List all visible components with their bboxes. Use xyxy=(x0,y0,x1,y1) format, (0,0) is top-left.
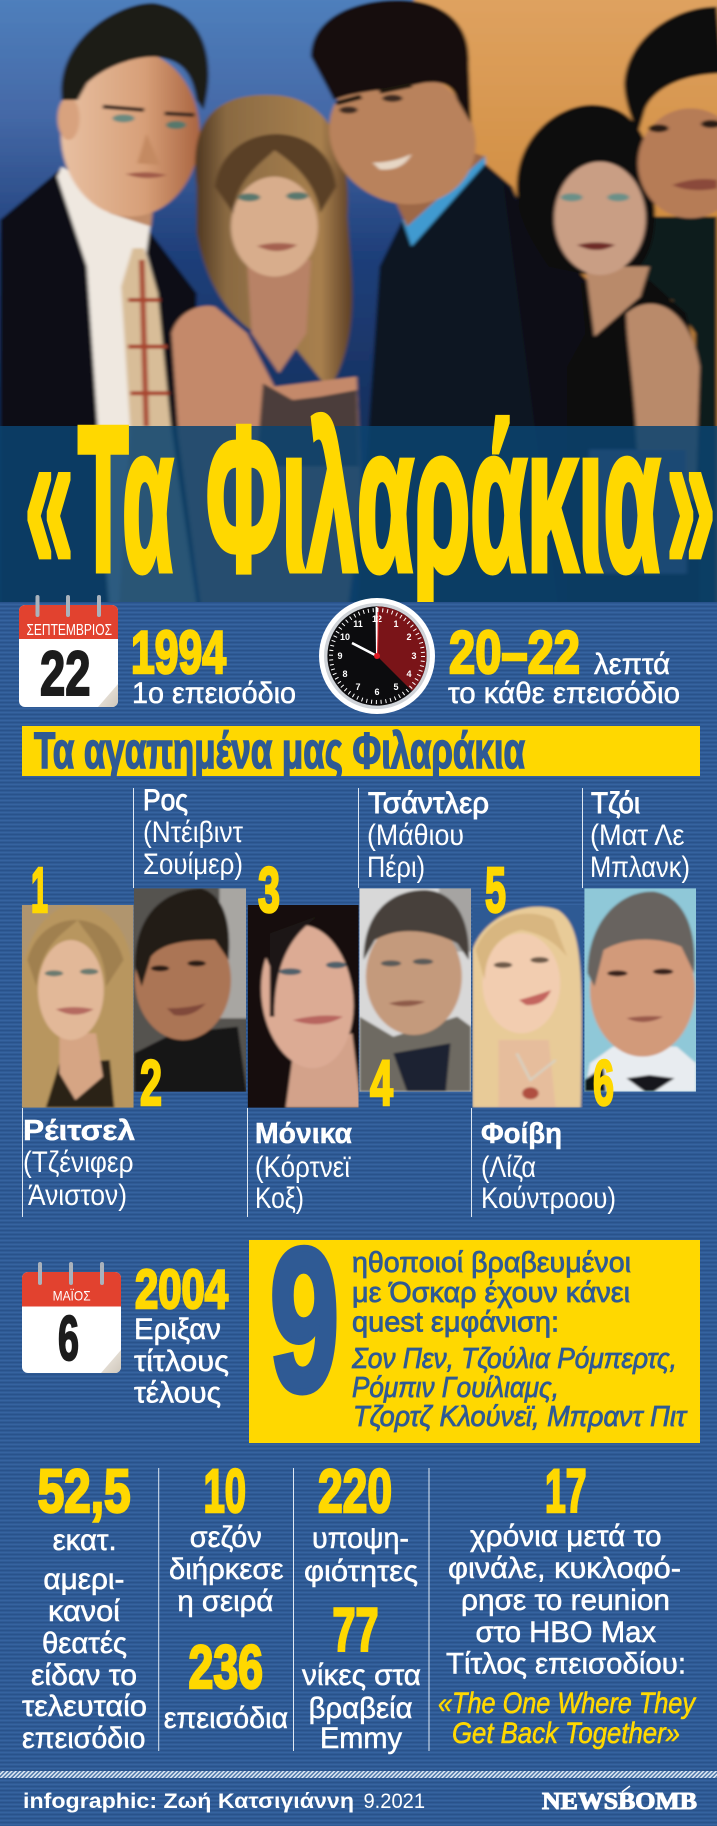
stat: 17 years, reunion: Τίτλος επεισοδίου: xyxy=(446,1648,686,1680)
icon: clock: 9 xyxy=(337,651,343,661)
caption: Ross: Σουίμερ) xyxy=(143,848,243,881)
caption: Monica xyxy=(255,1118,352,1215)
first episode date: 1994 xyxy=(131,619,226,686)
stat: 52.5 million viewers: επεισόδιο xyxy=(22,1722,146,1755)
caption: Ross xyxy=(143,784,243,881)
stat: 17 years, reunion: ρησε το reunion xyxy=(461,1584,670,1617)
stat: 10 seasons, 236 episodes: σεζόν xyxy=(190,1521,262,1554)
icon: calendar 22 September xyxy=(19,597,118,709)
photo: Phoebe xyxy=(469,902,588,1112)
episode duration: το κάθε επεισόδιο xyxy=(448,677,680,710)
caption: Joey: Τζόι xyxy=(591,787,640,820)
stat: 17 years, reunion: χρόνια μετά το xyxy=(470,1520,662,1553)
episode duration: λεπτά xyxy=(594,648,670,681)
stat: 220 nominations, 77 Emmy wins: υποψη- xyxy=(312,1522,409,1555)
stat: 10 seasons, 236 episodes: επεισόδια xyxy=(164,1702,288,1735)
panel: Oscar winners guest appearances: 9 xyxy=(270,1207,339,1434)
caption: Chandler: Πέρι) xyxy=(367,851,425,884)
caption: Chandler: (Μάθιου xyxy=(367,819,464,852)
final episode date: τίτλους xyxy=(134,1345,229,1378)
caption: Monica: Κοξ) xyxy=(255,1182,304,1215)
photo: Chandler xyxy=(357,885,476,1095)
first episode date xyxy=(131,619,296,710)
stat: 220 nominations, 77 Emmy wins: νίκες στα xyxy=(302,1659,421,1692)
caption: Chandler: Τσάντλερ xyxy=(368,787,489,820)
stat: 52.5 million viewers: εκατ. xyxy=(53,1524,117,1557)
title: « xyxy=(25,384,73,614)
panel: Oscar winners guest appearances: ηθοποιοί βραβευμένοι xyxy=(352,1247,631,1279)
caption: Phoebe: Κούντροου) xyxy=(481,1182,616,1215)
panel: Oscar winners guest appearances: με Όσκαρ έχουν κάνει xyxy=(352,1277,630,1309)
panel: Oscar winners guest appearances xyxy=(249,1207,700,1443)
caption: Phoebe: (Λίζα xyxy=(481,1151,536,1184)
stat: 10 seasons, 236 episodes: διήρκεσε xyxy=(169,1553,284,1586)
icon: clock: 4 xyxy=(406,669,412,679)
icon: clock: 6 xyxy=(374,687,380,697)
icon: clock: 2 xyxy=(406,632,412,642)
caption: Monica: (Κόρτνεϊ xyxy=(255,1151,351,1184)
stat: 10 seasons, 236 episodes: η σειρά xyxy=(177,1585,273,1618)
rank numbers: 5 xyxy=(485,854,506,926)
footer credit: infographic: Ζωή Κατσιγιάννη xyxy=(23,1790,354,1813)
icon: clock: 1 xyxy=(393,619,399,629)
portrait photos xyxy=(18,885,700,1113)
stat: 220 nominations, 77 Emmy wins: 77 xyxy=(332,1596,378,1664)
photo: Rachel xyxy=(18,900,137,1113)
hero photo: the cast xyxy=(0,0,717,610)
rank numbers: 2 xyxy=(140,1047,162,1119)
title: Τα xyxy=(78,384,173,614)
photo: Joey xyxy=(581,885,700,1095)
stat: 220 nominations, 77 Emmy wins: Emmy xyxy=(320,1722,402,1755)
caption: Joey: Μπλανκ) xyxy=(590,851,690,884)
final episode date: 2004 xyxy=(135,1258,228,1320)
icon: calendar 22 September: 22 xyxy=(40,639,90,709)
panel: Oscar winners guest appearances: Σον Πεν, Τζούλια Ρόμπερτς, xyxy=(351,1343,677,1375)
rank numbers xyxy=(31,854,614,1119)
caption: Phoebe: Φοίβη xyxy=(481,1118,562,1150)
rank numbers: 4 xyxy=(370,1047,393,1119)
icon: clock: 12 xyxy=(372,614,382,624)
stat: 52.5 million viewers xyxy=(22,1457,147,1755)
icon: clock: 10 xyxy=(340,632,350,642)
panel: Oscar winners guest appearances: quest εμφάνιση: xyxy=(352,1306,559,1338)
final episode date: τέλους xyxy=(134,1376,221,1410)
stat: 52.5 million viewers: 52,5 xyxy=(38,1457,131,1525)
title xyxy=(27,412,713,602)
icon: clock: 5 xyxy=(393,682,399,692)
caption: Chandler xyxy=(367,787,489,884)
episode duration: 20–22 xyxy=(449,619,580,686)
photo: Ross xyxy=(130,885,249,1095)
stat: 52.5 million viewers: θεατές xyxy=(42,1627,127,1660)
icon: clock: 7 xyxy=(355,682,361,692)
stat: 220 nominations, 77 Emmy wins: φιότητες xyxy=(304,1555,418,1588)
stats dividers xyxy=(159,1468,429,1751)
stat: 52.5 million viewers: αμερι- xyxy=(43,1563,124,1596)
final episode date: Εριξαν xyxy=(134,1313,221,1346)
caption: Phoebe xyxy=(481,1118,616,1215)
final episode date xyxy=(134,1258,229,1410)
icon: clock xyxy=(319,598,435,714)
stat: 10 seasons, 236 episodes xyxy=(164,1457,288,1735)
stat: 17 years, reunion: στο HBO Max xyxy=(476,1616,656,1649)
footer credit: 9.2021 xyxy=(364,1790,425,1813)
icon: calendar 6 May xyxy=(22,1264,121,1374)
rank numbers: 1 xyxy=(31,854,48,926)
icon: calendar 6 May: ΜΑΪΟΣ xyxy=(53,1288,91,1304)
stat: 17 years, reunion xyxy=(438,1457,697,1750)
icon: calendar 22 September: ΣΕΠΤΕΜΒΡΙΟΣ xyxy=(26,622,112,639)
panel: Oscar winners guest appearances: Ρόμπιν Γουίλιαμς, xyxy=(352,1372,559,1404)
icon: calendar 6 May: 6 xyxy=(58,1304,79,1374)
stat: 17 years, reunion: 17 xyxy=(545,1457,586,1525)
icon: clock: 11 xyxy=(353,619,363,629)
episode duration xyxy=(448,619,680,710)
translucent title band xyxy=(0,426,717,602)
stat: 10 seasons, 236 episodes: 10 xyxy=(204,1457,246,1525)
caption: Joey xyxy=(590,787,690,884)
stat: 10 seasons, 236 episodes: 236 xyxy=(188,1633,263,1701)
first episode date: 1ο επεισόδιο xyxy=(132,677,296,710)
photo: Monica xyxy=(245,902,364,1112)
panel: Oscar winners guest appearances: Τζορτζ Κλούνεϊ, Μπραντ Πιτ xyxy=(353,1401,688,1433)
caption: Ross: (Ντέιβιντ xyxy=(143,816,243,849)
stat: 52.5 million viewers: κανοί xyxy=(48,1595,120,1628)
stat: 220 nominations, 77 Emmy wins: βραβεία xyxy=(309,1692,413,1725)
rank numbers: 3 xyxy=(258,854,280,926)
logo: Newsbomb: NEWSBOMB xyxy=(542,1789,697,1815)
icon: clock: 3 xyxy=(411,651,417,661)
caption: Rachel: Ρέιτσελ xyxy=(23,1115,135,1147)
icon: clock: 8 xyxy=(342,669,348,679)
caption: Rachel: Άνιστον) xyxy=(28,1179,127,1212)
column divider lines xyxy=(22,788,582,1217)
stat: 52.5 million viewers: είδαν το xyxy=(31,1659,137,1692)
stat: 220 nominations, 77 Emmy wins: 220 xyxy=(318,1457,392,1525)
caption: Rachel: (Τζένιφερ xyxy=(23,1146,134,1179)
caption: Rachel xyxy=(23,1115,135,1212)
caption: Ross: Ρος xyxy=(143,784,188,817)
hatched footer rule xyxy=(0,1771,717,1778)
stat: 17 years, reunion: Get Back Together» xyxy=(452,1717,680,1750)
stat: 220 nominations, 77 Emmy wins xyxy=(302,1457,421,1755)
stat: 17 years, reunion: φινάλε, κυκλοφό- xyxy=(448,1552,681,1585)
caption: Monica: Μόνικα xyxy=(255,1118,352,1150)
stat: 52.5 million viewers: τελευταίο xyxy=(22,1690,147,1723)
caption: Joey: (Ματ Λε xyxy=(590,819,684,852)
rank numbers: 6 xyxy=(593,1047,614,1119)
